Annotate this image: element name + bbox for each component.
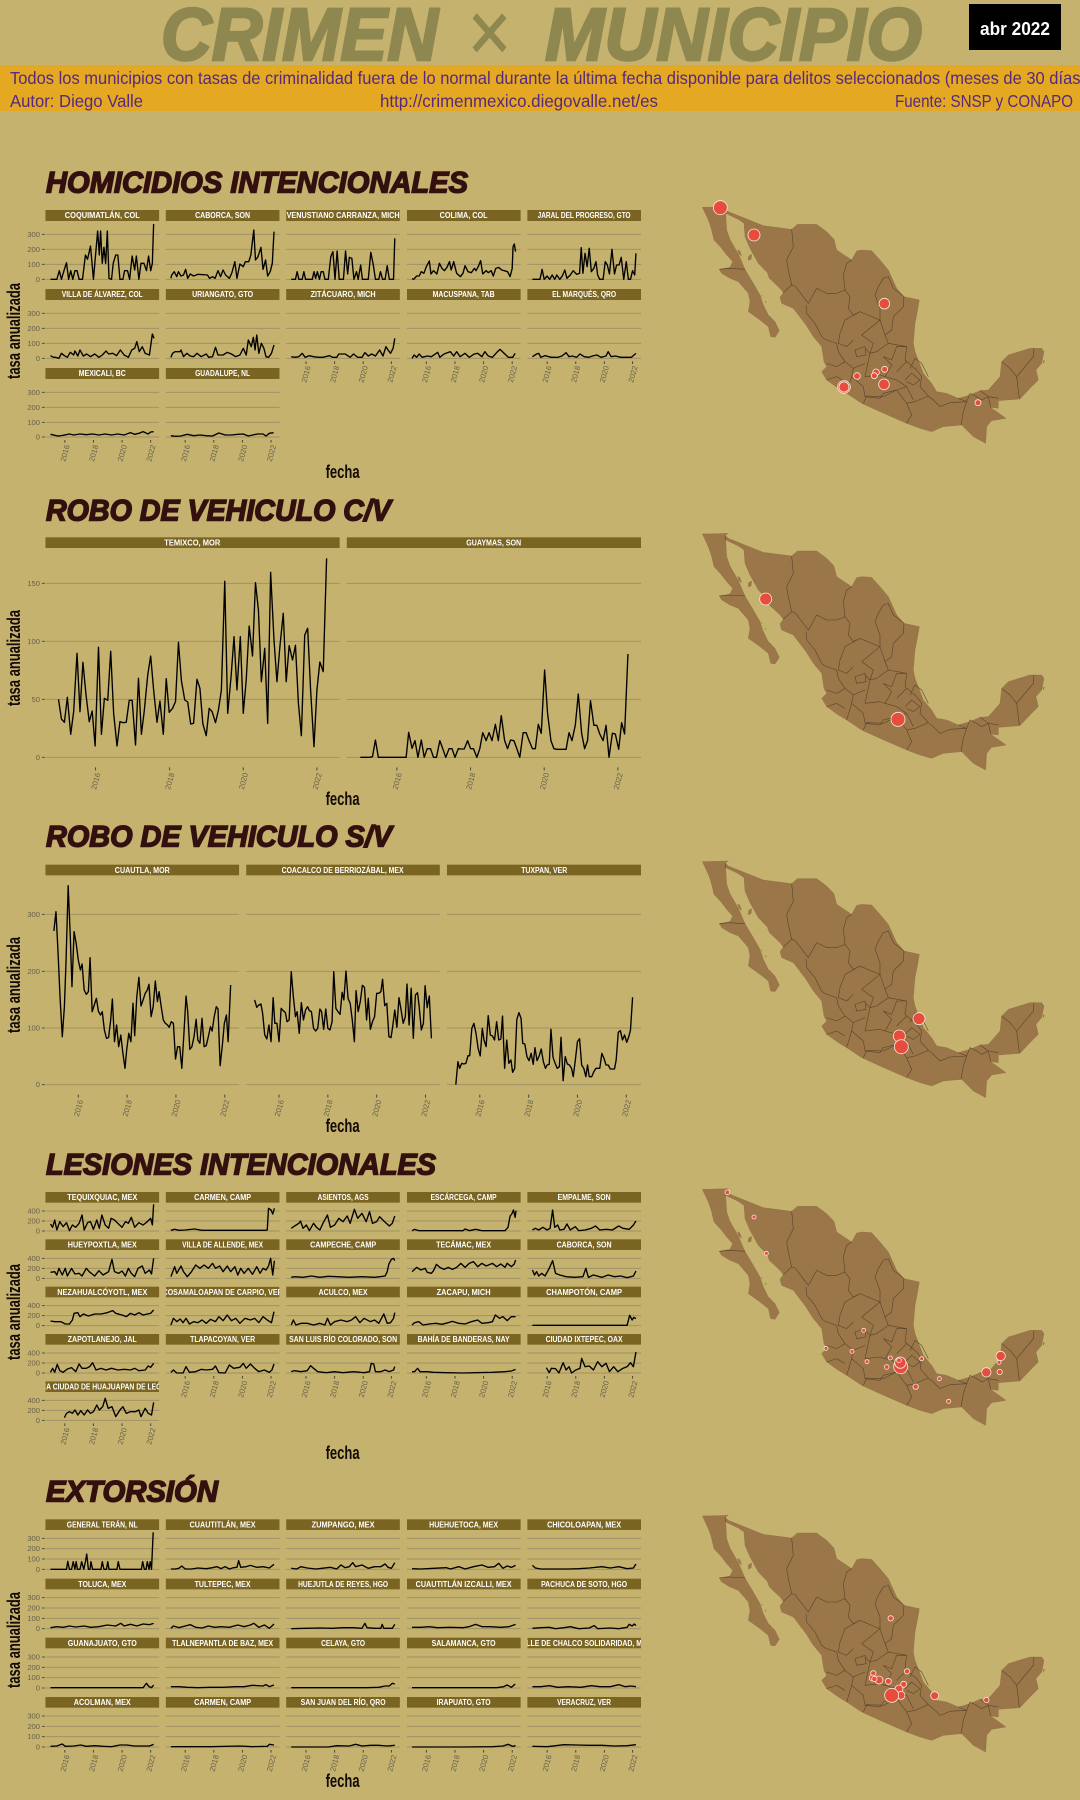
y axis ticks: 400 [27,1396,40,1405]
y axis ticks: 200 [27,403,40,412]
y axis ticks: 0 [36,1368,40,1378]
panel: Nezahualcóyotl [45,1286,159,1326]
x axis ticks: 2020 [116,444,129,462]
y axis ticks: 300 [27,388,40,397]
x axis ticks: 2018 [328,1754,341,1772]
axis ticks: 2022 [218,1099,231,1117]
panel: Villa de Álvarez [45,289,159,358]
map: robo con violencia [702,533,1045,770]
y axis ticks: 100 [27,1614,40,1623]
panel: General Terán: GENERAL TERÁN, NL [67,1520,138,1530]
y axis ticks [27,1534,45,1752]
panel: Tecámac [407,1239,521,1278]
panel: Coacalco de Berriozábal [246,865,440,1085]
panel: Asientos [286,1192,400,1231]
y axis ticks: 0 [36,275,40,284]
panel: Tequixquiac [45,1192,159,1231]
y axis ticks: 200 [27,245,40,254]
panel: El Marqués: EL MARQUÉS, QRO [552,289,616,299]
panel: Huehuetoca [407,1519,521,1569]
heading: ROBO DE VEHICULO S/V [46,820,395,854]
panel: Acolman: ACOLMAN, MEX [74,1697,131,1707]
y axis ticks: 200 [27,1406,40,1415]
panel: Uriangato: URIANGATO, GTO [192,289,253,299]
y axis ticks: 300 [27,230,40,239]
x axis ticks: 2016 [541,1380,554,1398]
panel: Zacapu [407,1287,521,1326]
x axis ticks: 2022 [626,1380,640,1398]
panel: Campeche [286,1239,400,1278]
x axis ticks: 2016 [59,444,72,462]
y axis ticks: 100 [27,1673,40,1682]
panel: Macuspana [407,289,521,358]
panel: San Luis Río Colorado [286,1334,400,1373]
axis ticks: 2020 [170,1099,183,1117]
panel: Jaral del Progreso [527,210,641,279]
axis ticks [27,910,633,1117]
y axis ticks: 0 [36,432,40,442]
axis ticks: 2022 [419,1099,432,1117]
y axis ticks: 200 [27,1358,40,1368]
panel: Uriangato [166,289,279,358]
section: lesiones intencionales [4,1148,1045,1463]
heading: EXTORSIÓN [46,1474,219,1508]
panel: Carmen: CARMEN, CAMP [194,1192,251,1202]
panel: Veracruz [527,1697,641,1747]
panel: Cosamaloapan de Carpio [163,1287,283,1326]
panel: Venustiano Carranza: VENUSTIANO CARRANZA, MICH [287,210,400,220]
axis ticks: 50 [32,695,40,704]
y axis ticks: 0 [36,1684,40,1692]
x axis ticks: 2020 [236,1380,249,1398]
y axis ticks: 100 [27,1732,40,1741]
x axis label: fecha [326,789,360,809]
panel: Heroica Ciudad de Huajuapan de León [20,1380,185,1420]
x axis ticks: 2020 [477,365,490,383]
panel: Tlalnepantla de Baz [166,1638,279,1688]
panel: Irapuato [407,1697,521,1747]
axis ticks: 2020 [571,1099,584,1117]
panel: Cuautitlán Izcalli: CUAUTITLÁN IZCALLI, MEX [416,1579,512,1589]
x axis ticks: 2016 [179,444,192,462]
y axis ticks: 0 [36,1565,40,1574]
x axis ticks: 2022 [265,444,278,462]
y axis ticks: 0 [36,1742,40,1752]
panel: El Marqués [527,289,641,358]
panel: Colima [407,210,521,279]
axis ticks: 2018 [464,772,477,790]
panel: Veracruz: VERACRUZ, VER [557,1697,612,1707]
panel: Macuspana: MACUSPANA, TAB [433,289,495,299]
y axis ticks: 400 [27,1206,40,1216]
panel: Cuautitlán Izcalli [407,1579,521,1629]
y axis ticks: 200 [27,1311,40,1320]
axis ticks: 2018 [121,1099,134,1117]
map: robo sin violencia [702,861,1045,1098]
panel: Venustiano Carranza [286,210,400,279]
panel: Aculco [286,1287,400,1326]
panel: Coquimatlán: COQUIMATLÁN, COL [65,210,140,220]
x axis ticks: 2022 [385,1754,399,1772]
y axis ticks: 0 [36,1321,40,1330]
y axis ticks: 200 [27,324,40,333]
panel: Temixco: TEMIXCO, MOR [164,538,221,548]
panel: Ciudad Ixtepec: CIUDAD IXTEPEC, OAX [546,1334,623,1344]
x axis ticks: 2018 [87,1754,100,1772]
section: extorsion [4,1474,1045,1791]
map: lesiones [702,1189,1045,1425]
x axis ticks: 2016 [420,365,433,383]
x axis ticks [59,361,640,462]
panel: Zumpango [286,1519,400,1569]
panel: Zumpango: ZUMPANGO, MEX [312,1520,375,1530]
panel: Celaya: CELAYA, GTO [321,1638,365,1648]
panel: Chicoloapan [527,1519,641,1569]
x axis ticks [59,1376,640,1445]
panel: Huehuetoca: HUEHUETOCA, MEX [429,1520,498,1530]
y axis label: tasa anualizada [4,609,24,706]
panel: Guanajuato [45,1638,159,1688]
header band [0,65,1080,111]
panel: Toluca [45,1579,159,1629]
y axis ticks: 200 [27,1544,40,1553]
panel: Tlapacoyan: TLAPACOYAN, VER [190,1334,256,1344]
panel: Coquimatlán [45,210,159,279]
author: Autor: Diego Valle [10,91,143,111]
y axis ticks: 400 [27,1348,40,1358]
heading: LESIONES INTENCIONALES [46,1148,436,1182]
panel: Tuxpan [447,865,641,1085]
x axis ticks: 2016 [59,1754,72,1772]
axis ticks: 150 [27,579,40,588]
axis ticks: 2016 [273,1099,286,1117]
axis ticks: 2022 [612,772,625,790]
date badge [969,4,1061,50]
x axis ticks: 2018 [328,365,341,383]
y axis ticks: 200 [27,1663,40,1672]
axis ticks: 2016 [474,1099,487,1117]
panel: Caborca lesiones [527,1239,641,1278]
panel: Valle de Chalco Solidaridad [517,1638,651,1688]
x axis ticks: 2018 [449,365,462,383]
y axis ticks: 200 [27,1216,40,1226]
axis ticks: 2018 [522,1099,535,1117]
panel: Guadalupe [166,368,279,437]
x axis ticks: 2022 [144,1427,158,1445]
section: homicidios intencionales [4,166,1045,482]
axis ticks: 2016 [391,772,404,790]
y axis label: tasa anualizada [4,282,24,379]
x axis ticks: 2022 [144,1754,158,1772]
axis ticks: 2020 [237,772,250,790]
y axis ticks: 100 [27,339,40,348]
x axis label: fecha [326,1116,360,1136]
panel: Colima: COLIMA, COL [440,210,488,220]
y axis ticks: 0 [36,1274,40,1283]
panel: Villa de Allende: VILLA DE ALLENDE, MEX [182,1240,263,1250]
panel: Cuautla [45,865,239,1085]
x axis ticks: 2018 [328,1380,341,1398]
x axis ticks: 2020 [598,1380,611,1398]
x axis ticks: 2020 [116,1754,129,1772]
x axis ticks: 2016 [420,1754,433,1772]
axis ticks: 2020 [538,772,551,790]
panel: Celaya [286,1638,400,1688]
panel: Zapotlanejo: ZAPOTLANEJO, JAL [68,1334,137,1344]
x axis ticks: 2020 [357,1754,370,1772]
panel: Champotón [527,1286,641,1326]
y axis ticks: 0 [36,1226,40,1236]
x axis ticks: 2020 [357,1380,370,1398]
y axis ticks: 200 [27,1264,40,1273]
x axis label: fecha [326,462,360,482]
y axis ticks [27,1206,45,1425]
panel: Tultepec: TULTEPEC, MEX [195,1579,251,1589]
panel: Caborca: CABORCA, SON [195,210,250,220]
y axis ticks: 0 [36,1624,40,1633]
x axis ticks: 2022 [626,1754,640,1772]
section: robo de vehiculo con violencia [4,494,1045,809]
panel: Coacalco de Berriozábal: COACALCO DE BERRIOZÁBAL, MEX [282,865,404,875]
y axis ticks: 0 [36,354,40,363]
panel: San Juan del Río: SAN JUAN DEL RÍO, QRO [301,1697,386,1707]
x axis ticks: 2016 [179,1754,192,1772]
y axis ticks [27,230,45,442]
panel: Cuautitlán: CUAUTITLÁN, MEX [190,1520,256,1530]
y axis ticks: 0 [36,1416,40,1425]
x axis ticks: 2020 [357,365,370,383]
panel: Acolman [45,1697,159,1747]
y axis label: tasa anualizada [4,1263,24,1360]
panel: Tecámac: TECÁMAC, MEX [436,1240,491,1250]
panel: Mexicali [45,368,159,437]
x axis ticks: 2016 [300,1754,313,1772]
x axis ticks: 2020 [598,365,611,383]
axis ticks: 2020 [370,1099,383,1117]
y axis label: tasa anualizada [4,936,24,1033]
x axis ticks: 2020 [598,1754,611,1772]
x axis label: fecha [326,1443,360,1463]
panel: Empalme [527,1192,641,1231]
panel: Huejutla de Reyes: HUEJUTLA DE REYES, HGO [298,1579,388,1589]
panel: Zapotlanejo [45,1334,159,1373]
panel: San Juan del Río [286,1697,400,1747]
x axis ticks: 2022 [144,444,158,462]
panel: Guaymas: GUAYMAS, SON [466,538,521,548]
panel: Asientos: ASIENTOS, AGS [318,1192,369,1202]
axis ticks: 200 [27,967,40,976]
section: robo de vehiculo sin violencia [4,820,1045,1136]
map: extorsion [702,1515,1045,1752]
x axis ticks: 2018 [208,1380,221,1398]
panel: Chicoloapan: CHICOLOAPAN, MEX [547,1520,621,1530]
x axis ticks: 2018 [569,1754,582,1772]
x axis ticks: 2018 [449,1754,462,1772]
x axis ticks: 2018 [87,1427,100,1445]
x axis ticks: 2020 [477,1754,490,1772]
panel: Caborca [166,210,279,279]
x axis ticks: 2022 [385,365,399,383]
panel: Villa de Allende [166,1239,279,1278]
x axis ticks: 2022 [506,1754,519,1772]
x axis ticks: 2022 [506,365,519,383]
axis ticks [27,579,625,790]
y axis ticks: 400 [27,1301,40,1310]
axis ticks: 100 [27,1024,40,1032]
panel: Campeche: CAMPECHE, CAMP [310,1240,376,1250]
y axis ticks: 300 [27,1593,40,1602]
y axis ticks: 100 [27,418,40,427]
panel: Pachuca de Soto: PACHUCA DE SOTO, HGO [541,1579,627,1589]
y axis ticks: 100 [27,1554,40,1564]
panel: Bahía de Banderas [407,1334,521,1373]
y axis ticks: 200 [27,1722,40,1731]
y axis ticks: 100 [27,260,40,269]
panel: Guaymas [347,537,641,757]
x axis ticks: 2022 [265,1754,278,1772]
panel: Aculco: ACULCO, MEX [319,1287,368,1297]
axis ticks: 0 [36,753,40,762]
panel: Zitácuaro [286,289,400,358]
panel: Pachuca de Soto [527,1579,641,1629]
y axis ticks: 400 [27,1254,40,1263]
x axis ticks: 2020 [236,1754,249,1772]
x axis ticks [59,1750,640,1772]
x axis ticks: 2020 [116,1427,129,1445]
panel: Guadalupe: GUADALUPE, NL [195,368,250,378]
x axis ticks: 2022 [506,1380,519,1398]
x axis ticks: 2016 [420,1380,433,1398]
axis ticks: 2016 [72,1099,85,1117]
x axis ticks: 2020 [477,1380,490,1398]
y axis ticks: 300 [27,1652,40,1662]
panel: Toluca: TOLUCA, MEX [78,1579,127,1589]
panel: San Luis Río Colorado: SAN LUIS RÍO COLORADO, SON [289,1334,397,1344]
heading: HOMICIDIOS INTENCIONALES [46,166,468,200]
x axis ticks: 2016 [541,365,554,383]
x axis ticks: 2020 [236,444,249,462]
panel: Champotón: CHAMPOTÓN, CAMP [546,1286,622,1297]
x axis ticks: 2016 [541,1754,554,1772]
panel: Mexicali: MEXICALI, BC [79,368,126,378]
x axis ticks: 2018 [208,1754,221,1772]
x axis ticks: 2016 [179,1380,192,1398]
panel: Hueypoxtla [45,1239,159,1278]
panel: Carmen extorsion: CARMEN, CAMP [194,1697,251,1707]
panel: Cuautitlán [166,1519,279,1569]
x axis label: fecha [326,1771,360,1791]
url: http://crimenmexico.diegovalle.net/es [380,91,658,111]
x axis ticks: 2016 [300,1380,313,1398]
axis ticks: 2018 [163,772,176,790]
panel: Cuautla: CUAUTLA, MOR [115,865,170,875]
axis ticks: 2022 [620,1099,633,1117]
panel: Escárcega: ESCÁRCEGA, CAMP [431,1192,497,1202]
x axis ticks: 2022 [385,1380,399,1398]
y axis ticks: 300 [27,309,40,318]
panel: Tultepec [166,1579,279,1629]
panel: Guanajuato: GUANAJUATO, GTO [68,1638,137,1648]
x axis ticks: 2018 [569,365,582,383]
y axis ticks: 200 [27,1604,40,1612]
x axis ticks: 2018 [449,1380,462,1398]
axis ticks: 2022 [311,772,324,790]
panel: Nezahualcóyotl: NEZAHUALCÓYOTL, MEX [57,1286,148,1297]
panel: Tequixquiac: TEQUIXQUIAC, MEX [67,1192,138,1202]
x axis ticks: 2016 [300,365,313,383]
panel: Zacapu: ZACAPU, MICH [437,1287,491,1297]
panel: Salamanca [407,1638,521,1688]
panel: Tlalnepantla de Baz: TLALNEPANTLA DE BAZ, MEX [172,1638,273,1648]
axis ticks: 0 [36,1080,40,1089]
axis ticks: 100 [27,637,40,646]
panel: Escárcega [407,1192,521,1231]
panel: Bahía de Banderas: BAHÍA DE BANDERAS, NAY [418,1334,510,1344]
panel: Villa de Álvarez: VILLA DE ÁLVAREZ, COL [62,289,143,299]
map: homicidios [702,201,1045,443]
panel: Temixco [45,537,340,757]
heading: ROBO DE VEHICULO C/V [46,494,394,528]
y axis ticks: 300 [27,1534,40,1543]
y axis ticks: 300 [27,1712,40,1720]
x axis ticks: 2018 [208,444,221,462]
panel: Tlapacoyan [166,1334,279,1373]
x axis ticks: 2016 [59,1427,72,1445]
panel: Jaral del Progreso: JARAL DEL PROGRESO, GTO [538,210,631,220]
panel: Carmen [166,1192,279,1231]
panel: Irapuato: IRAPUATO, GTO [437,1697,491,1707]
panel: Caborca lesiones: CABORCA, SON [557,1240,612,1250]
x axis ticks: 2022 [265,1380,278,1398]
axis ticks: 2016 [89,772,102,790]
panel: Salamanca: SALAMANCA, GTO [432,1638,496,1648]
panel: Ciudad Ixtepec [527,1334,641,1373]
x axis ticks: 2018 [87,444,100,462]
panel: Huejutla de Reyes [286,1579,400,1629]
date badge: abr 2022 [980,19,1050,39]
axis ticks: 2018 [322,1099,335,1117]
x axis ticks: 2018 [569,1380,582,1398]
x axis ticks: 2022 [626,365,640,383]
panel: Empalme: EMPALME, SON [558,1192,611,1202]
title [161,0,922,79]
panel: General Terán [45,1519,159,1569]
axis ticks: 300 [27,910,40,919]
y axis label: tasa anualizada [4,1591,24,1688]
panel: Zitácuaro: ZITÁCUARO, MICH [311,289,376,299]
panel: Tuxpan: TUXPAN, VER [521,865,568,875]
panel: Carmen extorsion [166,1697,279,1747]
panel: Hueypoxtla: HUEYPOXTLA, MEX [68,1240,137,1250]
